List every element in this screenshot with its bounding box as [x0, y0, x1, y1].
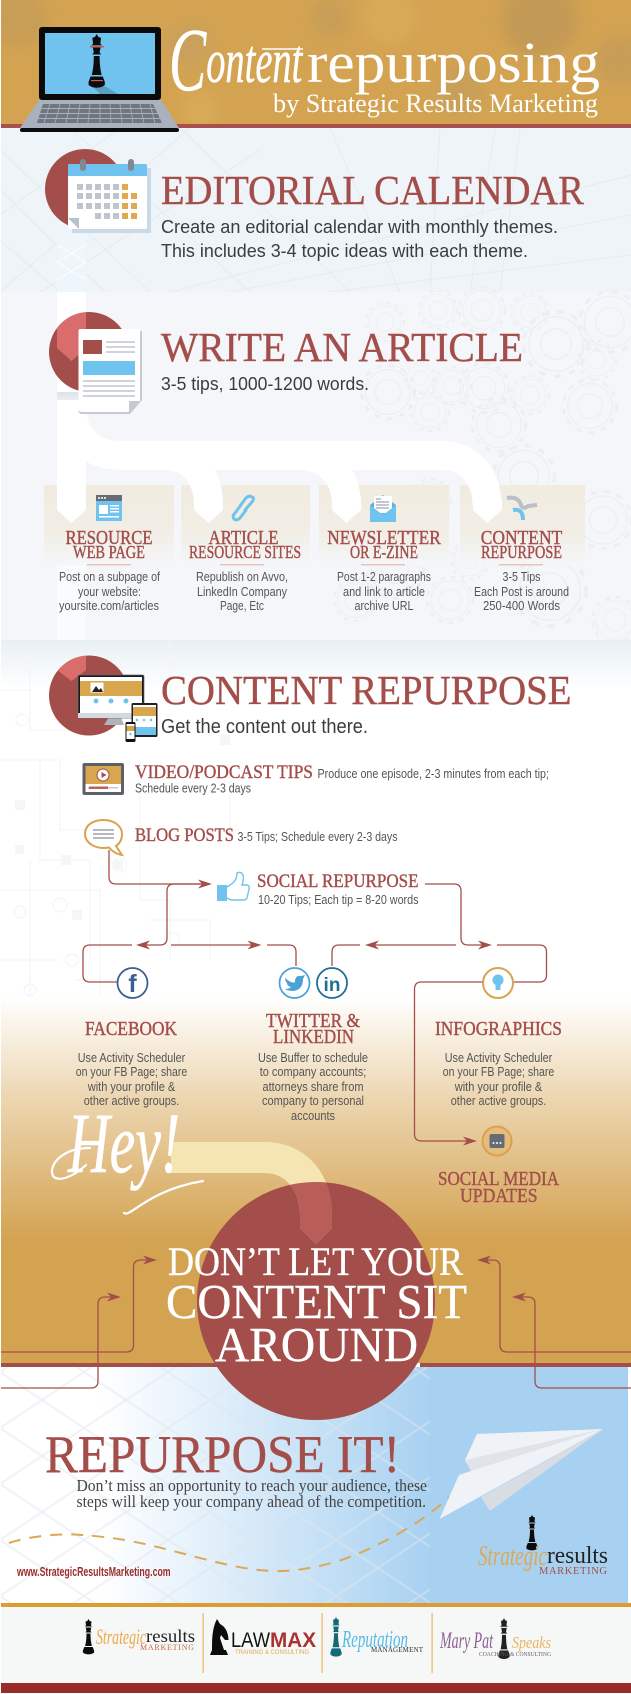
icon: thumbs up: [217, 872, 249, 901]
heading: OR E-ZINE: [350, 542, 418, 562]
description: on your FB Page; share: [443, 1064, 554, 1079]
heading and text: Produce one episode, 2-3 minutes from each tip;: [318, 767, 549, 781]
panel: resource web page: [59, 495, 160, 613]
heading and text: Schedule every 2-3 days: [135, 782, 251, 796]
logo: strategic results marketing: [478, 1515, 608, 1577]
description: with your profile &: [87, 1079, 176, 1094]
icon: chain link: [233, 496, 254, 520]
panel: content repurpose: [49, 656, 570, 742]
red stripe left and right of circle: [0, 1363, 631, 1367]
description: other active groups.: [84, 1093, 179, 1108]
heading and text: VIDEO/PODCAST TIPS: [135, 762, 313, 783]
description: [474, 569, 569, 613]
icon: facebook: f: [128, 970, 137, 998]
description: your website:: [78, 584, 141, 599]
description: accounts: [291, 1108, 335, 1123]
title: repurposing: [307, 30, 600, 95]
callout headline: AROUND: [215, 1317, 418, 1372]
header banner: [0, 0, 631, 132]
heading: [266, 1010, 360, 1048]
heading: RESOURCE SITES: [189, 542, 301, 562]
heading: LINKEDIN: [273, 1026, 354, 1048]
item: twitter and linkedin: [258, 968, 368, 1123]
description: Create an editorial calendar with monthly themes.: [161, 217, 558, 237]
heading and text: BLOG POSTS: [135, 825, 234, 846]
icon: responsive devices: [49, 656, 158, 742]
icon: browser window: [96, 495, 123, 522]
description: steps will keep your company ahead of the competition.: [76, 1492, 426, 1511]
title: C: [169, 11, 207, 110]
big red circle: [197, 1182, 435, 1420]
description: [196, 569, 288, 613]
item: social repurpose: [217, 871, 418, 907]
icon: linkedin: in: [324, 975, 340, 996]
logo: strategic results marketing: results: [547, 1543, 608, 1569]
icon: calendar: [45, 149, 151, 233]
description: Get the content out there.: [161, 716, 368, 738]
logo: strategic results marketing: [83, 1619, 195, 1654]
heading and text: [135, 762, 549, 796]
heading: SOCIAL REPURPOSE: [257, 871, 418, 892]
icon: envelope: [370, 495, 396, 522]
script callout: Hey: [52, 1095, 203, 1214]
arrows into the circle: [0, 1256, 631, 1388]
logo: mary pat speaks: Speaks: [512, 1633, 551, 1652]
heading: [481, 527, 562, 562]
description: other active groups.: [451, 1093, 546, 1108]
logo: mary pat speaks: COACHING & CONSULTING: [479, 1652, 552, 1658]
item: facebook: [76, 968, 187, 1108]
description: and link to article: [343, 584, 425, 599]
description: to company accounts;: [260, 1064, 366, 1079]
panel: newsletter or e-zine: [327, 495, 441, 613]
description: [76, 1050, 187, 1108]
logo: reputation management: [330, 1617, 424, 1657]
thin white page edge: [0, 0, 1, 1694]
heading: TWITTER &: [266, 1010, 360, 1032]
heading: CONTENT REPURPOSE: [161, 667, 572, 713]
logo: lawmax: [210, 1619, 316, 1656]
description: with your profile &: [454, 1079, 543, 1094]
description: Republish on Avvo,: [196, 569, 288, 584]
icon: laptop with chess king: [20, 27, 179, 132]
description: attorneys share from: [262, 1079, 364, 1094]
description: Post on a subpage of: [59, 569, 160, 584]
heading: WEB PAGE: [73, 542, 145, 562]
logo: strategic results marketing: MARKETING: [140, 1643, 194, 1652]
callout headline: CONTENT SIT: [166, 1274, 467, 1329]
logo: lawmax: TRAINING & CONSULTING: [235, 1649, 309, 1656]
title: by Strategic Results Marketing: [273, 89, 598, 118]
heading: UPDATES: [460, 1185, 538, 1207]
heading: REPURPOSE IT!: [45, 1426, 400, 1484]
description: [258, 1050, 368, 1123]
logo: strategic results marketing: results: [146, 1626, 195, 1646]
logo: mary pat speaks: [439, 1618, 552, 1659]
description: [443, 1050, 554, 1108]
icon: light bulb: [483, 968, 513, 998]
description: Each Post is around: [474, 584, 569, 599]
logo: lawmax: MAX: [270, 1629, 316, 1652]
description: Use Buffer to schedule: [258, 1050, 368, 1065]
panel: footer logos: [83, 1613, 552, 1673]
panel: repurpose it: [9, 1426, 608, 1579]
heading: REPURPOSE: [481, 542, 562, 562]
heading and text: [135, 825, 398, 846]
script callout: Hey: Hey!: [67, 1095, 180, 1191]
heading: WRITE AN ARTICLE: [161, 324, 523, 370]
icon: chat dots: [482, 1126, 512, 1156]
website link: www.StrategicResultsMarketing.com: [16, 1565, 171, 1579]
description: LinkedIn Company: [197, 584, 287, 599]
icon: branching arrows: [507, 498, 537, 520]
item: video podcast tips: [82, 762, 549, 796]
heading: ARTICLE: [208, 527, 278, 549]
item: blog posts: [85, 820, 398, 855]
description: Don’t miss an opportunity to reach your audience, these: [76, 1476, 427, 1495]
panel: write an article: [49, 312, 522, 414]
description: Post 1-2 paragraphs: [337, 569, 431, 584]
heading: [438, 1168, 559, 1207]
description: archive URL: [354, 598, 414, 613]
icon: twitter: [280, 968, 310, 998]
description: [59, 569, 160, 613]
description: This includes 3-4 topic ideas with each theme.: [161, 241, 528, 261]
description: Page, Etc: [220, 598, 264, 613]
heading and text: 3-5 Tips; Schedule every 2-3 days: [238, 830, 398, 844]
logo: reputation management: MANAGEMENT: [371, 1646, 424, 1654]
icon: document: [49, 312, 142, 414]
dashed flight path: [9, 1497, 449, 1571]
logo: strategic results marketing: Strategic: [96, 1624, 146, 1649]
icon: speech bubble: [85, 820, 122, 855]
description: 250-400 Words: [483, 598, 560, 613]
heading: RESOURCE: [66, 527, 152, 549]
icon: paper plane: [440, 1429, 603, 1519]
description: company to personal: [262, 1093, 364, 1108]
item: social media updates: [438, 1126, 559, 1207]
description: [337, 569, 431, 613]
icon: linkedin: [317, 968, 347, 998]
callout headline: [166, 1239, 467, 1372]
description: [161, 217, 558, 261]
logo: lawmax: LAW: [231, 1629, 270, 1652]
title: [169, 11, 600, 118]
description: Use Activity Scheduler: [78, 1050, 186, 1065]
item: infographics: [435, 968, 562, 1108]
description: on your FB Page; share: [76, 1064, 187, 1079]
heading: [189, 527, 301, 562]
heading: CONTENT: [481, 527, 562, 549]
heading: SOCIAL MEDIA: [438, 1168, 559, 1190]
icon: video player: [82, 763, 124, 795]
logo: strategic results marketing: Strategic: [478, 1541, 547, 1572]
logo: strategic results marketing: MARKETING: [539, 1566, 607, 1577]
white ribbon flow path: [44, 223, 585, 640]
heading: [327, 527, 441, 562]
description: 10-20 Tips; Each tip = 8-20 words: [258, 893, 418, 907]
description: 3-5 tips, 1000-1200 words.: [161, 374, 369, 394]
heading: FACEBOOK: [85, 1018, 177, 1040]
logo: reputation management: Reputation: [341, 1627, 408, 1653]
panel: article resource sites: [189, 496, 301, 613]
logo: mary pat speaks: Mary Pat: [439, 1628, 493, 1653]
description: yoursite.com/articles: [59, 598, 159, 613]
callout headline: DON’T LET YOUR: [168, 1239, 463, 1284]
panel: editorial calendar: [45, 149, 585, 261]
description: 3-5 Tips: [502, 569, 541, 584]
title: ontent: [206, 28, 304, 96]
pale ribbon from Hey: [171, 1142, 332, 1244]
heading: INFOGRAPHICS: [435, 1018, 562, 1040]
heading: [66, 527, 152, 562]
description: Use Activity Scheduler: [445, 1050, 553, 1065]
heading: EDITORIAL CALENDAR: [161, 167, 585, 213]
description: [76, 1476, 427, 1511]
panel: content repurpose card: [474, 498, 569, 613]
flow arrows: social repurpose network: [83, 850, 546, 1146]
heading: NEWSLETTER: [327, 527, 441, 549]
